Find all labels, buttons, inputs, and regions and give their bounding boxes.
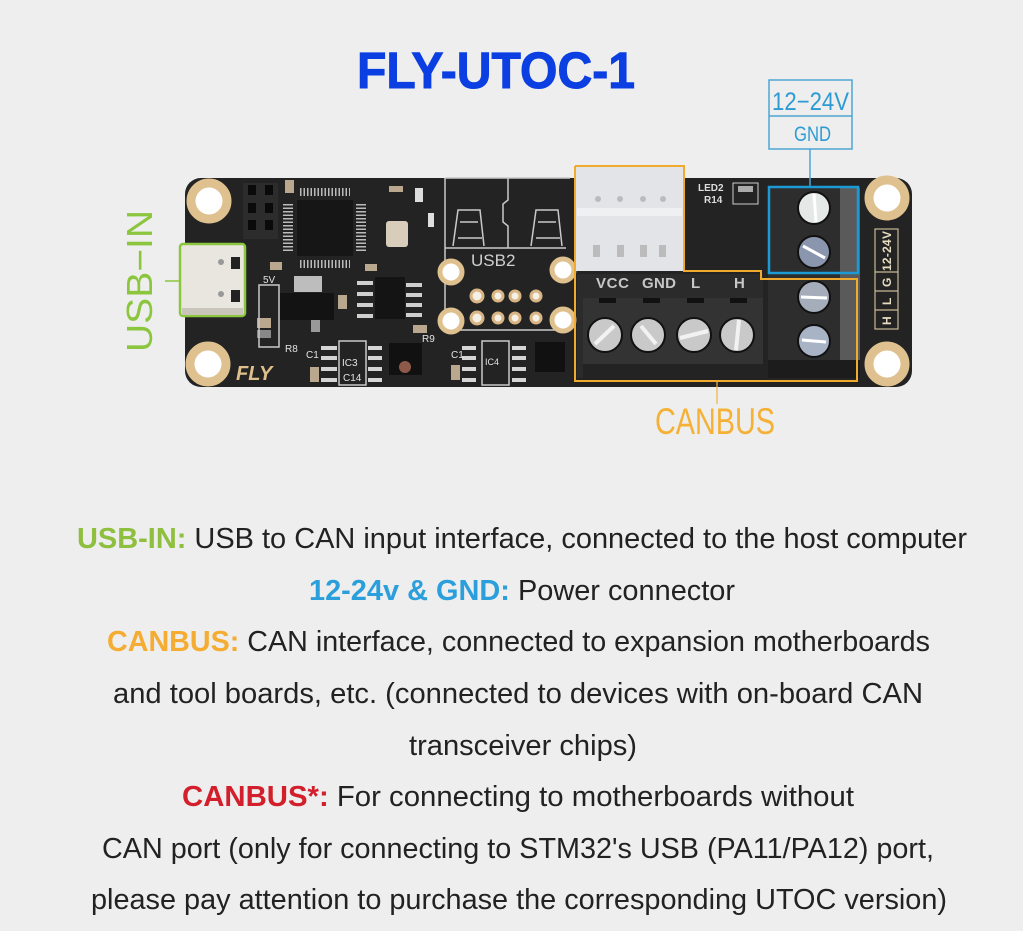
crystal [386, 221, 408, 247]
silkscreen outlines [259, 178, 570, 385]
USB-C port [180, 244, 245, 316]
mounting holes [190, 180, 905, 382]
CANBUS callout [655, 381, 775, 442]
board labels: R9 [422, 334, 435, 345]
power description: 12-24v & GND: Power connector [309, 575, 735, 607]
circuit board [180, 166, 912, 387]
board labels: IC4 [485, 357, 499, 367]
driver chip [375, 277, 405, 319]
small components [257, 180, 460, 382]
LED label: LED2 [698, 183, 724, 194]
12-24V GND callout [769, 80, 852, 186]
12-24V GND callout: 12−24V [772, 88, 849, 116]
pin header [243, 183, 278, 239]
CANBUS* description [91, 781, 947, 916]
FLY logo: FLY [236, 363, 274, 385]
LED label [698, 183, 758, 206]
circuit board: H [880, 316, 894, 325]
USB-IN callout: USB−IN [119, 210, 160, 352]
CAN terminal block: VCC [596, 275, 629, 292]
CANBUS* description: please pay attention to purchase the corresponding UTOC version) [91, 884, 947, 916]
IC3 and IC4 pins [321, 346, 526, 382]
CAN terminal block [577, 274, 763, 378]
side silkscreen label [875, 229, 898, 329]
USB-IN description: USB-IN: USB to CAN input interface, connected to the host computer [77, 523, 967, 555]
JST and CANBUS highlight [575, 166, 857, 381]
white JST connector [575, 166, 684, 271]
power highlight box [769, 187, 858, 273]
CAN terminal block: GND [642, 275, 676, 292]
board labels: IC3 [342, 358, 358, 369]
CANBUS description: and tool boards, etc. (connected to devices with on-board CAN [113, 678, 923, 710]
CANBUS description [107, 626, 930, 762]
circuit board: 12-24V [880, 231, 894, 271]
board labels: R8 [285, 344, 298, 355]
jumpers [389, 342, 565, 375]
board labels: 5V [263, 275, 276, 286]
title: FLY-UTOC-1 [357, 42, 635, 99]
board labels: C1 [306, 350, 319, 361]
power terminal block [768, 186, 860, 378]
microcontroller chip [288, 192, 361, 264]
CANBUS description: CANBUS: CAN interface, connected to expansion motherboards [107, 626, 930, 658]
CANBUS callout: CANBUS [655, 401, 775, 442]
USB2 pads [440, 259, 574, 332]
board labels: C1 [451, 350, 464, 361]
CANBUS* description: CAN port (only for connecting to STM32's USB (PA11/PA12) port, [102, 833, 934, 865]
description text [77, 523, 967, 916]
CAN terminal block: L [691, 275, 700, 292]
circuit board: L [880, 298, 894, 305]
board labels [263, 251, 515, 384]
circuit board: G [880, 278, 894, 287]
LED label: R14 [704, 195, 723, 206]
board labels: USB2 [471, 251, 515, 270]
CANBUS description: transceiver chips) [409, 730, 637, 762]
regulator [280, 276, 334, 320]
CANBUS* description: CANBUS*: For connecting to motherboards without [182, 781, 854, 813]
CAN terminal block: H [734, 275, 745, 292]
board labels: C14 [343, 373, 362, 384]
12-24V GND callout: GND [794, 123, 831, 146]
